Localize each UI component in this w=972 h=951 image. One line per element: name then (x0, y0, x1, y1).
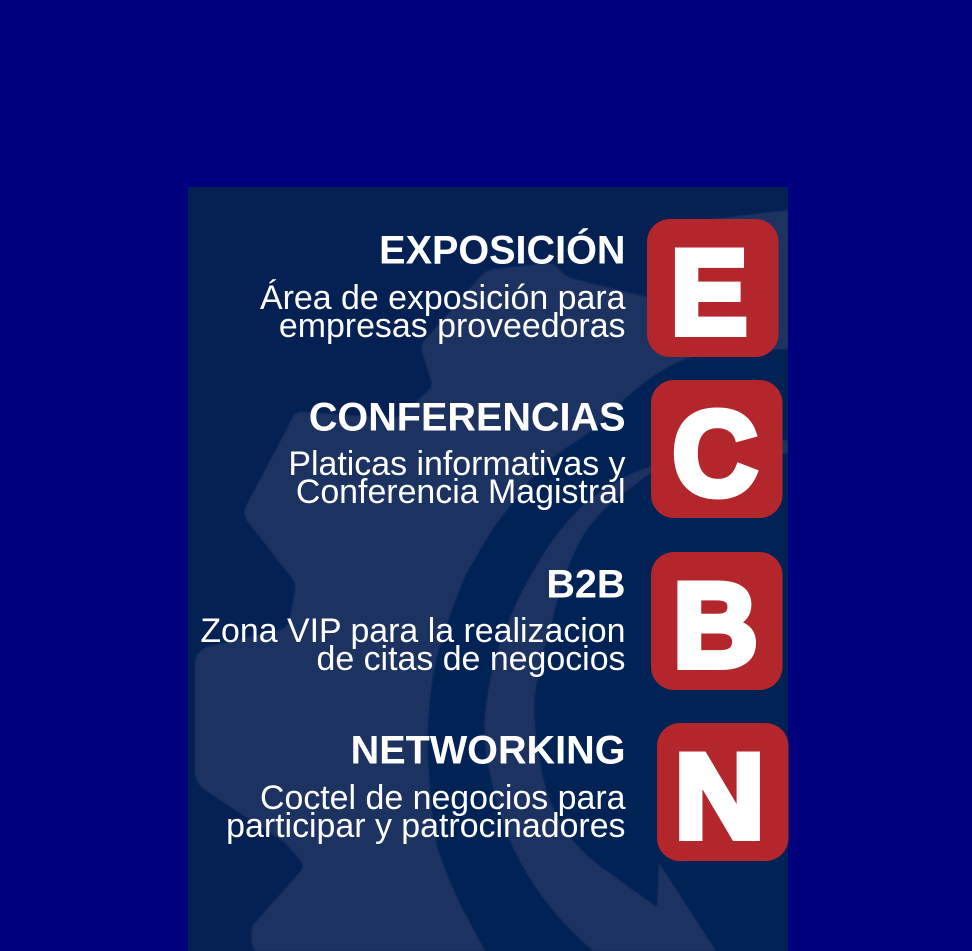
icon: letter E badge: E (671, 225, 747, 359)
description: B2B: Zona VIP para la realizacion (200, 612, 626, 650)
watermark: gear (195, 210, 788, 951)
watermark: curved arrow (485, 440, 788, 951)
description: Exposición: Área de exposición para (260, 279, 626, 317)
description: Conferencias: Platicas informativas y (288, 445, 626, 483)
description: Networking: participar y patrocinadores (226, 807, 626, 845)
heading: Conferencias: CONFERENCIAS (309, 396, 626, 440)
description: B2B: de citas de negocios (316, 640, 626, 678)
icon: letter N badge (657, 723, 788, 863)
item: B2B (200, 552, 782, 693)
icon: letter C badge: C (673, 387, 757, 521)
heading: Networking: NETWORKING (351, 728, 626, 772)
description: Networking: Coctel de negocios para (260, 779, 626, 817)
description: Conferencias: Conferencia Magistral (296, 473, 626, 511)
item: Networking (226, 723, 788, 863)
item: Conferencias (288, 380, 782, 521)
heading: Exposición: EXPOSICIÓN (379, 228, 626, 272)
icon: letter B badge: B (673, 558, 758, 693)
item: Exposición (260, 219, 778, 359)
icon: letter E badge (647, 219, 778, 359)
description: Exposición: empresas proveedoras (279, 307, 626, 345)
icon: letter C badge (651, 380, 782, 521)
icon: letter N badge: N (674, 729, 765, 863)
heading: B2B: B2B (546, 562, 626, 606)
panel: dark blue background (188, 187, 788, 951)
icon: letter B badge (651, 552, 782, 693)
watermark: dark inner band (427, 349, 788, 951)
